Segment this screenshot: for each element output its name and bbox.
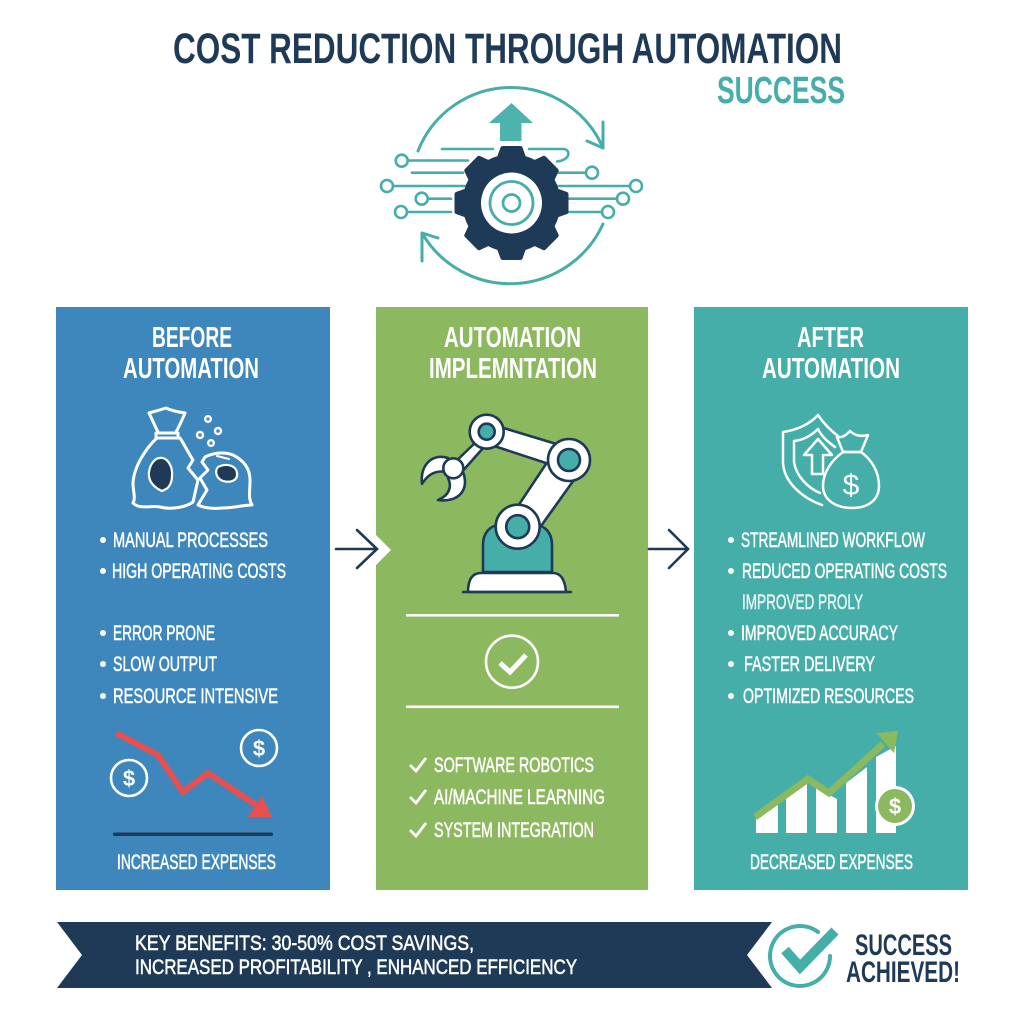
heading: AUTOMATION — [123, 353, 259, 385]
success achieved label: SUCCESS — [855, 929, 952, 962]
bullet list: STREAMLINED WORKFLOW — [741, 528, 925, 552]
icon: shield and money bag — [783, 415, 879, 508]
icon: success check — [770, 926, 835, 986]
panel background — [56, 307, 330, 890]
cycle arrow: top — [418, 87, 603, 151]
up arrow — [489, 103, 533, 141]
success achieved label — [846, 929, 960, 989]
checklist — [410, 753, 605, 842]
bullet list: OPTIMIZED RESOURCES — [743, 684, 914, 708]
panel: before automation — [56, 307, 330, 890]
chart: rising bars with arrow and coin — [755, 731, 915, 833]
arrow: before to implementation — [336, 530, 377, 568]
icon: shield and money bag: $ — [843, 469, 860, 502]
divider with check badge — [406, 614, 619, 708]
chart: falling line with dollar coins: $ — [123, 766, 135, 791]
panel background — [376, 307, 648, 890]
bullet list: IMPROVED PROLY — [742, 590, 863, 614]
chart: rising bars with arrow and coin: $ — [889, 794, 901, 819]
arrow: implementation to after — [649, 530, 688, 568]
icon: broken money bag — [133, 408, 252, 508]
icon: automation gear with circuits and cycle arrows — [381, 87, 642, 284]
bullet list: HIGH OPERATING COSTS — [112, 559, 286, 583]
bullet list — [728, 528, 947, 708]
success achieved label: ACHIEVED! — [846, 956, 960, 989]
chart: falling line with dollar coins — [111, 730, 277, 836]
caption: INCREASED EXPENSES — [117, 850, 276, 874]
bullet list: ERROR PRONE — [113, 621, 215, 645]
heading: AUTOMATION — [444, 322, 581, 354]
heading: BEFORE — [152, 322, 232, 354]
bullet list: RESOURCE INTENSIVE — [113, 684, 278, 708]
panel background — [694, 307, 968, 890]
checklist: SOFTWARE ROBOTICS — [434, 753, 594, 777]
banner: key benefits — [57, 922, 772, 988]
icon: robot arm — [422, 415, 590, 592]
heading — [123, 322, 259, 385]
banner: key benefits: INCREASED PROFITABILITY , ENHANCED EFFICIENCY — [135, 955, 577, 979]
heading — [429, 322, 597, 385]
heading — [762, 322, 900, 385]
bullet list: IMPROVED ACCURACY — [741, 621, 898, 645]
bullet list: SLOW OUTPUT — [113, 652, 217, 676]
bullet list: MANUAL PROCESSES — [113, 528, 268, 552]
heading: AUTOMATION — [762, 353, 900, 385]
bullet list — [100, 528, 286, 708]
heading: IMPLEMNTATION — [429, 353, 597, 385]
bullet list: FASTER DELIVERY — [744, 652, 875, 676]
panel: after automation — [694, 307, 968, 890]
gear — [454, 146, 568, 260]
panel: automation implementation — [376, 307, 648, 890]
circuit lines — [381, 149, 642, 218]
heading: AFTER — [797, 322, 864, 354]
banner: key benefits: KEY BENEFITS: 30-50% COST SAVINGS, — [135, 931, 474, 955]
cycle arrow: bottom — [422, 224, 603, 284]
checklist: AI/MACHINE LEARNING — [434, 785, 605, 809]
checklist: SYSTEM INTEGRATION — [434, 818, 594, 842]
chart: falling line with dollar coins: $ — [253, 736, 265, 761]
caption: DECREASED EXPENSES — [750, 850, 913, 874]
subtitle: success: SUCCESS — [717, 70, 845, 112]
